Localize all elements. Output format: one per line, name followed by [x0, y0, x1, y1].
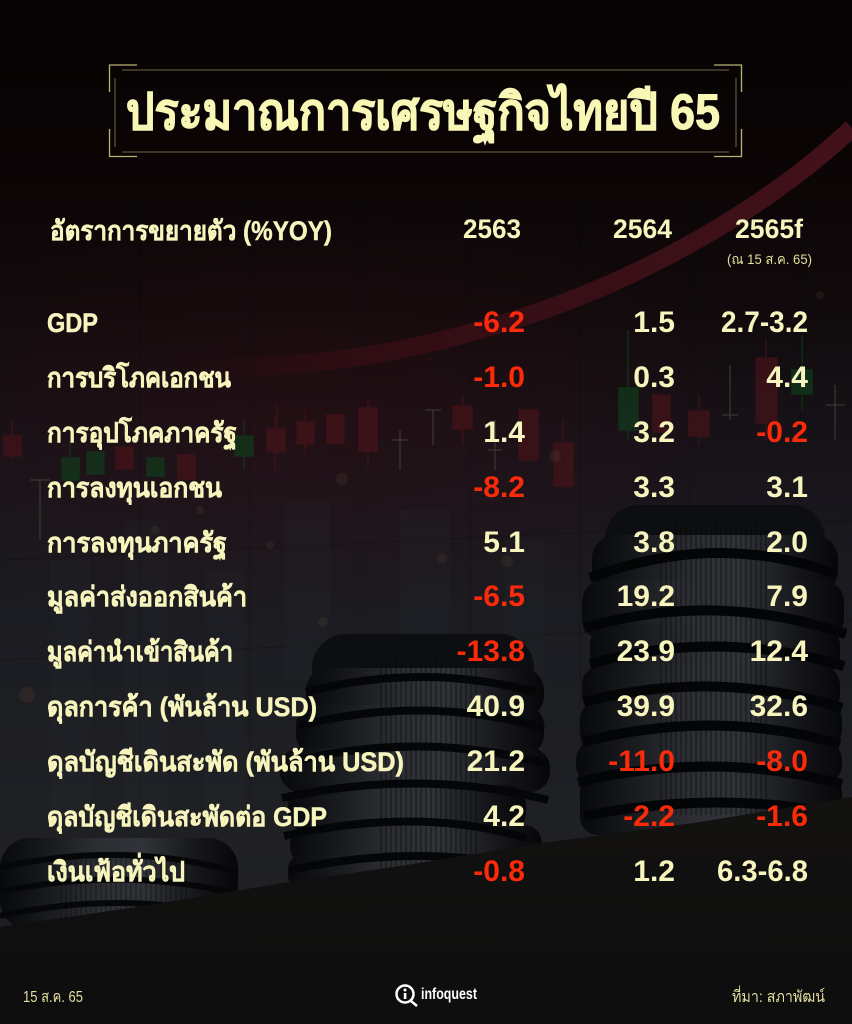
row: imports: 23.9: [617, 635, 675, 668]
dark hill foreground: [0, 797, 852, 1024]
row: current account: 21.2: [467, 745, 525, 778]
row: private consumption: 4.4: [766, 361, 808, 394]
table header: 2563: [463, 214, 521, 244]
row: public consumption: -0.2: [756, 416, 808, 449]
row: GDP: GDP: [47, 308, 98, 338]
footer date: 15 ส.ค. 65: [23, 989, 83, 1006]
row: public investment: การลงทุนภาครัฐ: [47, 528, 227, 561]
row: private consumption: -1.0: [473, 361, 525, 394]
row: current account: -8.0: [756, 745, 808, 778]
row: inflation: เงินเฟ้อทั่วไป: [47, 852, 185, 887]
row: trade balance: 40.9: [467, 690, 525, 723]
row: private consumption: 0.3: [633, 361, 675, 394]
row: private investment: 3.3: [633, 471, 675, 504]
title frame: [110, 65, 742, 156]
row: imports: มูลค่านำเข้าสินค้า: [47, 637, 233, 669]
row: exports: -6.5: [473, 580, 525, 613]
row: public investment: 3.8: [633, 526, 675, 559]
row: public consumption: [47, 416, 808, 451]
row: trade balance: ดุลการค้า (พันล้าน USD): [47, 692, 317, 724]
table header: อัตราการขยายตัว (%YOY): [50, 216, 332, 246]
coin stack: middle: [280, 634, 550, 890]
row: trade balance: [47, 690, 808, 724]
row: inflation: 6.3-6.8: [717, 855, 808, 888]
row: inflation: 1.2: [633, 855, 675, 888]
row: private investment: -8.2: [473, 471, 525, 504]
row: GDP: 1.5: [633, 306, 675, 339]
row: public investment: 5.1: [483, 526, 525, 559]
row: current account to GDP: [47, 800, 808, 834]
row: current account: -11.0: [608, 745, 675, 778]
row: GDP: [47, 306, 808, 339]
row: imports: 12.4: [750, 635, 808, 668]
row: current account to GDP: ดุลบัญชีเดินสะพัดต่อ GDP: [47, 802, 327, 834]
row: private investment: [47, 471, 808, 505]
candlestick chart: [4, 330, 845, 540]
row: public consumption: 1.4: [483, 416, 525, 449]
row: public investment: [47, 526, 808, 561]
coin stack: left: [0, 838, 238, 930]
row: private consumption: การบริโภคเอกชน: [47, 361, 231, 393]
row: exports: [47, 580, 808, 614]
row: public consumption: 3.2: [633, 416, 675, 449]
row: current account: ดุลบัญชีเดินสะพัด (พันล้าน USD): [47, 747, 404, 779]
row: exports: 7.9: [766, 580, 808, 613]
row: exports: 19.2: [617, 580, 675, 613]
row: GDP: 2.7-3.2: [721, 306, 808, 339]
row: trade balance: 39.9: [617, 690, 675, 723]
row: current account: [47, 745, 808, 779]
row: trade balance: 32.6: [750, 690, 808, 723]
row: public investment: 2.0: [766, 526, 808, 559]
table header: (ณ 15 ส.ค. 65): [727, 251, 812, 267]
title: ประมาณการเศรษฐกิจไทยปี 65: [126, 83, 720, 144]
coin stack: right: [576, 505, 846, 835]
table header: [50, 214, 812, 267]
row: private consumption: [47, 361, 808, 394]
row: current account to GDP: -2.2: [623, 800, 675, 833]
infoquest logo: infoquest: [421, 986, 478, 1003]
bokeh dots: [19, 291, 824, 709]
row: private investment: การลงทุนเอกชน: [47, 473, 222, 505]
row: public consumption: การอุปโภคภาครัฐ: [47, 416, 237, 451]
row: imports: -13.8: [457, 635, 525, 668]
source: ที่มา: สภาพัฒน์: [732, 985, 825, 1006]
row: current account to GDP: -1.6: [756, 800, 808, 833]
red trend arc: [190, 128, 852, 368]
row: GDP: -6.2: [473, 306, 525, 339]
infoquest logo: [396, 986, 478, 1006]
row: inflation: -0.8: [473, 855, 525, 888]
row: current account to GDP: 4.2: [483, 800, 525, 833]
table header: 2564: [613, 214, 672, 244]
row: inflation: [47, 852, 808, 888]
row: exports: มูลค่าส่งออกสินค้า: [47, 582, 247, 614]
table header: 2565f: [735, 214, 804, 244]
row: private investment: 3.1: [766, 471, 808, 504]
row: imports: [47, 635, 808, 669]
